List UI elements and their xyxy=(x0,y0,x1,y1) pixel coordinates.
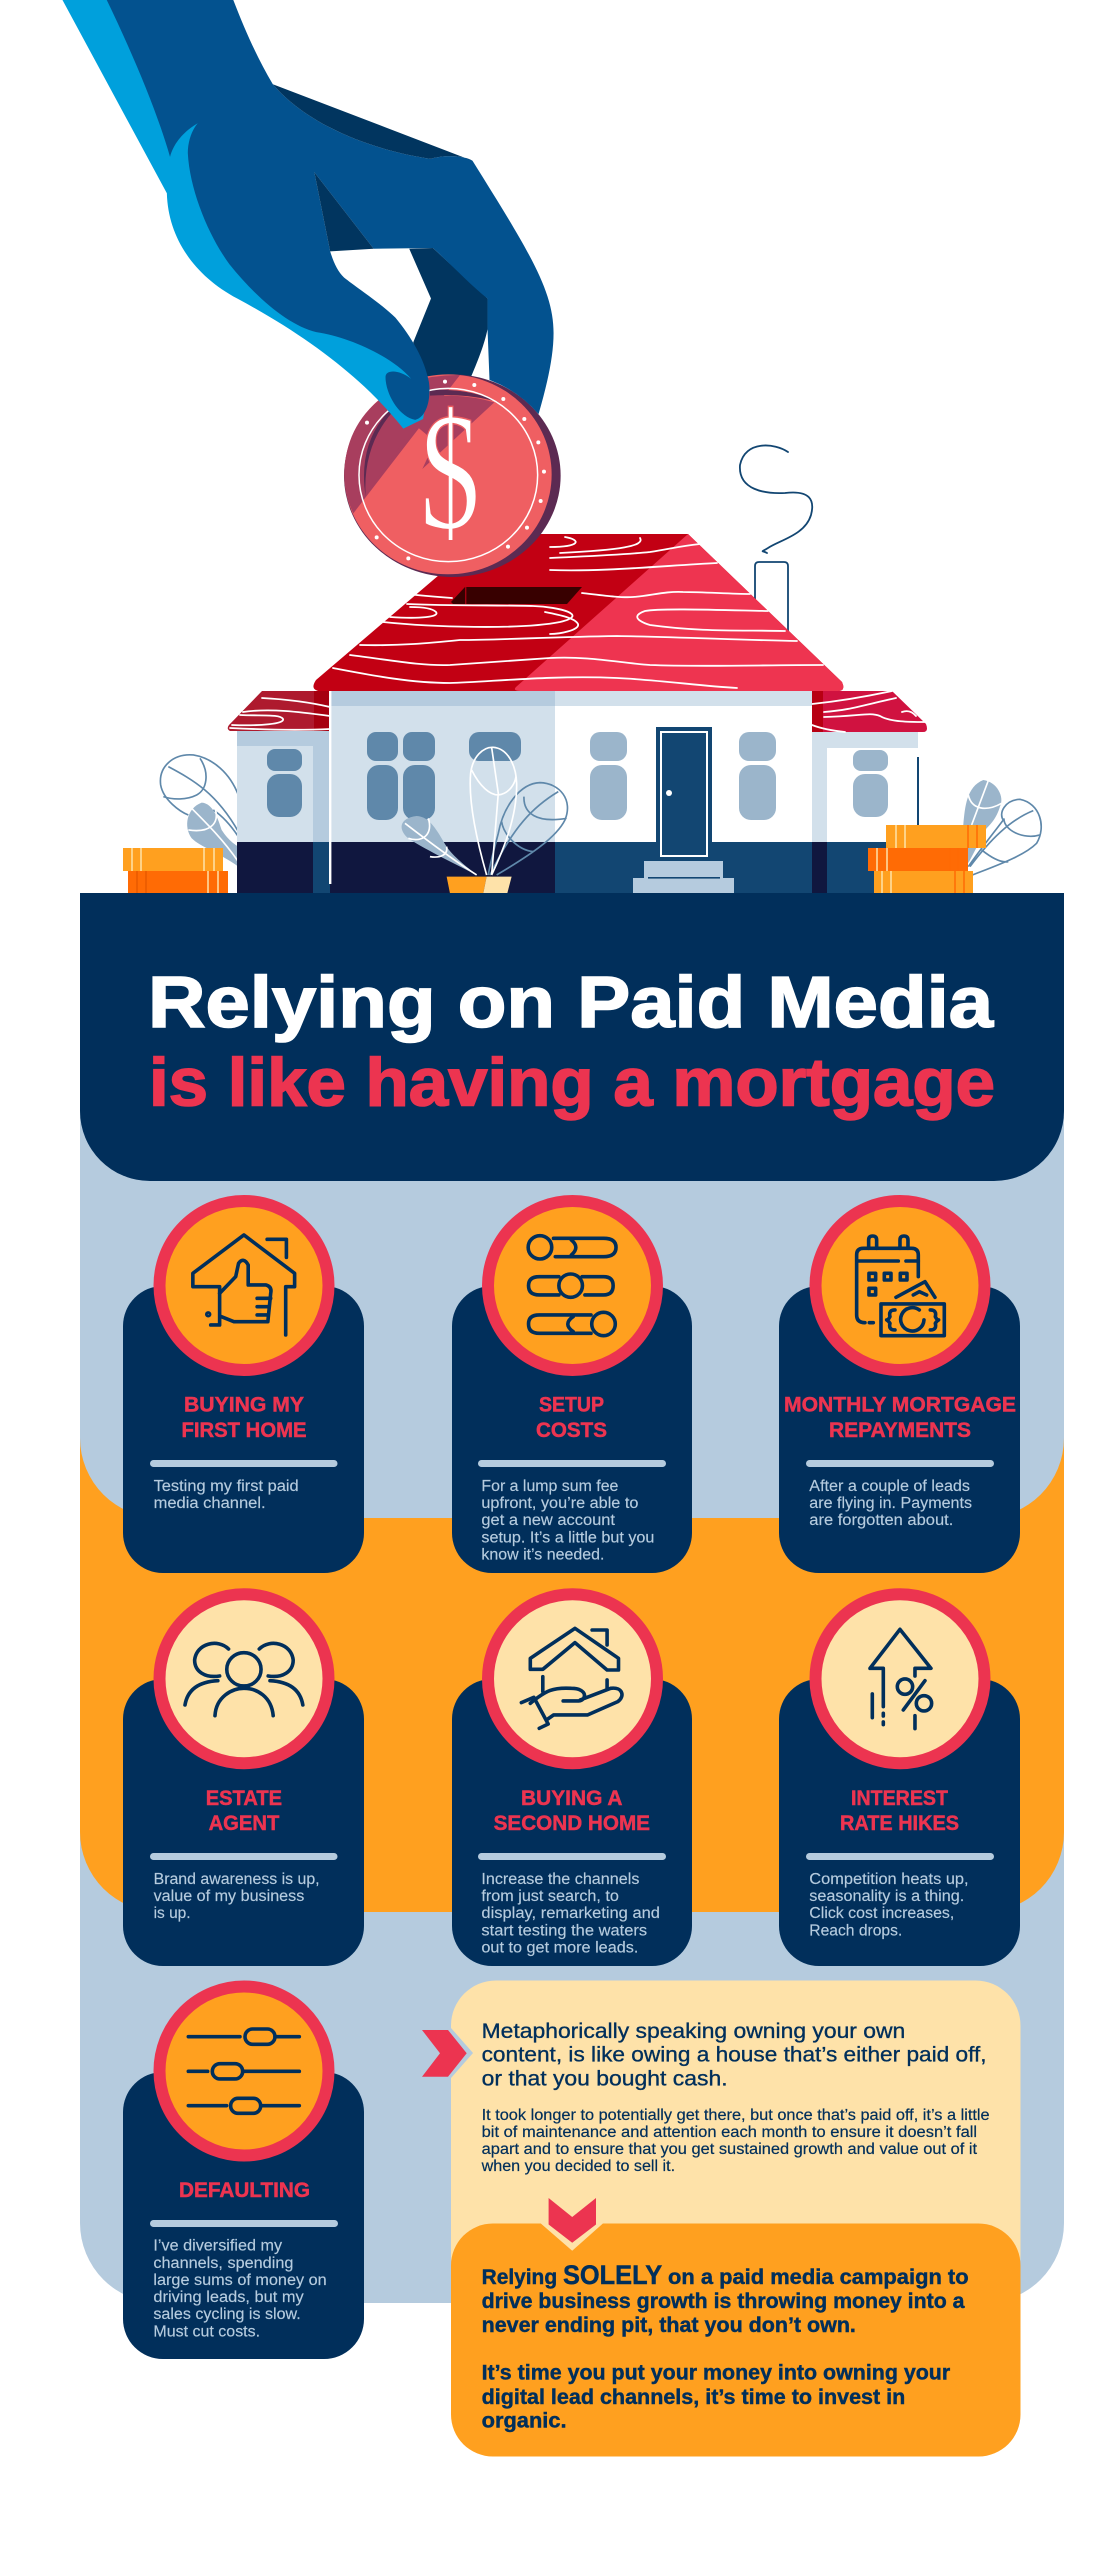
body text xyxy=(154,1478,299,1512)
conclusion text two: organic. xyxy=(482,2408,567,2432)
body text: media channel. xyxy=(154,1495,266,1512)
heading: DEFAULTING xyxy=(179,2178,310,2202)
icon: three people xyxy=(160,1594,328,1763)
heading: MONTHLY MORTGAGE xyxy=(784,1393,1016,1417)
body text: seasonality is a thing. xyxy=(809,1888,964,1905)
body text: know it’s needed. xyxy=(481,1546,604,1564)
conclusion text one: SOLELY xyxy=(563,2260,662,2290)
heading xyxy=(536,1393,607,1442)
heading xyxy=(494,1786,650,1835)
body text: driving leads, but my xyxy=(153,2289,304,2306)
body text: large sums of money on xyxy=(153,2272,327,2289)
supporting text: apart and to ensure that you get sustained growth and value out of it xyxy=(482,2141,978,2158)
front door and steps xyxy=(633,727,734,893)
body text: are flying in. Payments xyxy=(809,1495,972,1512)
supporting text: It took longer to potentially get there, but once that’s paid off, it’s a little xyxy=(482,2107,990,2124)
right wing roof xyxy=(812,691,927,732)
conclusion text two: It’s time you put your money into owning your xyxy=(482,2361,951,2385)
heading: SECOND HOME xyxy=(494,1811,650,1835)
card: defaulting xyxy=(123,1986,364,2359)
heading: INTEREST xyxy=(851,1786,948,1810)
body text xyxy=(809,1871,969,1939)
body text: value of my business xyxy=(154,1888,305,1905)
body text: is up. xyxy=(154,1905,191,1922)
body text: I’ve diversified my xyxy=(153,2238,282,2255)
coin xyxy=(344,374,561,577)
card: monthly mortgage repayments xyxy=(779,1201,1020,1573)
heading: BUYING A xyxy=(521,1786,622,1810)
right wing of house xyxy=(812,732,919,893)
left plant xyxy=(160,755,238,867)
icon: house with thumbs up xyxy=(160,1201,328,1370)
chimney and smoke xyxy=(740,445,812,640)
body text: upfront, you’re able to xyxy=(481,1495,638,1512)
hand shadows xyxy=(273,84,473,251)
conclusion text two: digital lead channels, it’s time to invest in xyxy=(482,2385,905,2409)
body text: Testing my first paid xyxy=(154,1478,299,1495)
background band: orange xyxy=(80,1300,1064,1912)
divider xyxy=(806,1460,994,1467)
card: estate agent xyxy=(123,1594,364,1966)
divider xyxy=(150,1853,338,1860)
icon: toggles xyxy=(488,1201,657,1370)
sleeve highlight xyxy=(62,0,429,429)
lead text: or that you bought cash. xyxy=(482,2066,728,2090)
divider xyxy=(150,1460,338,1467)
body text: setup. It’s a little but you xyxy=(481,1529,654,1546)
hand body xyxy=(107,0,554,420)
panel: metaphor callout xyxy=(422,1980,1020,2300)
card: setup costs xyxy=(452,1201,692,1573)
body text: After a couple of leads xyxy=(809,1478,970,1495)
body text: get a new account xyxy=(481,1512,616,1529)
conclusion text one: never ending pit, that you don’t own. xyxy=(482,2313,856,2337)
supporting text xyxy=(481,2107,990,2175)
icon: house on open hand xyxy=(488,1594,657,1763)
dollar sign: $ xyxy=(420,378,480,565)
panel: conclusion callout xyxy=(451,2198,1020,2456)
background band: lower blue xyxy=(80,1700,1064,2303)
heading: SETUP xyxy=(539,1393,604,1417)
main house walls xyxy=(329,691,812,893)
card: buying a second home xyxy=(452,1594,692,1966)
body text: Reach drops. xyxy=(809,1922,902,1939)
background band: upper blue xyxy=(80,1000,1064,1518)
divider xyxy=(806,1853,994,1860)
conclusion text one: on a paid media campaign to xyxy=(668,2265,969,2289)
left book stack xyxy=(123,848,228,893)
left wing roof xyxy=(228,691,330,731)
arrow: down chevron xyxy=(541,2198,603,2251)
arrow: right chevron xyxy=(422,2028,473,2078)
card: buying my first home xyxy=(123,1201,364,1573)
divider xyxy=(478,1460,666,1467)
right book stack xyxy=(868,825,986,893)
body text: Brand awareness is up, xyxy=(154,1871,320,1888)
body text: start testing the waters xyxy=(481,1922,647,1939)
body text xyxy=(481,1871,660,1956)
icon: sliders xyxy=(160,1986,328,2156)
heading xyxy=(840,1786,959,1835)
divider xyxy=(150,2220,338,2227)
right plant xyxy=(963,780,1041,877)
body text: out to get more leads. xyxy=(481,1940,638,1956)
heading: ESTATE xyxy=(206,1786,282,1810)
lead text xyxy=(482,2019,987,2090)
heading xyxy=(206,1786,282,1835)
lead text: content, is like owing a house that’s either paid off, xyxy=(482,2043,987,2067)
conclusion text one: drive business growth is throwing money into a xyxy=(482,2289,966,2313)
index finger shadow xyxy=(409,248,488,387)
heading: BUYING MY xyxy=(184,1393,304,1417)
title panel xyxy=(80,893,1064,1181)
lead text: Metaphorically speaking owning your own xyxy=(482,2019,905,2043)
conclusion text two xyxy=(482,2361,951,2432)
supporting text: bit of maintenance and attention each month to ensure it doesn’t fall xyxy=(482,2124,977,2141)
illustration: hand dropping coin xyxy=(62,0,561,577)
left wing of house xyxy=(237,731,331,893)
body text xyxy=(809,1478,972,1529)
body text: channels, spending xyxy=(153,2255,293,2272)
card: interest rate hikes xyxy=(779,1594,1020,1966)
body text xyxy=(153,2238,327,2340)
icon: rising arrow with percent xyxy=(816,1594,984,1763)
body text: Must cut costs. xyxy=(153,2323,260,2340)
illustration: house with plants and books xyxy=(123,445,1041,893)
title line one: Relying on Paid Media xyxy=(148,963,994,1043)
icon: calendar and money xyxy=(816,1201,984,1370)
conclusion text one xyxy=(482,2260,969,2337)
body text: Increase the channels xyxy=(481,1871,640,1888)
supporting text: when you decided to sell it. xyxy=(481,2158,675,2175)
heading: COSTS xyxy=(536,1418,607,1442)
body text: sales cycling is slow. xyxy=(153,2306,301,2323)
hand with sleeve xyxy=(62,0,554,429)
conclusion text one: Relying xyxy=(482,2265,557,2289)
heading: REPAYMENTS xyxy=(829,1418,971,1442)
heading: AGENT xyxy=(209,1811,279,1835)
heading: FIRST HOME xyxy=(182,1418,306,1442)
body text xyxy=(154,1871,320,1922)
title line two: is like having a mortgage xyxy=(149,1044,995,1120)
body text: Competition heats up, xyxy=(809,1871,969,1888)
body text: display, remarketing and xyxy=(481,1905,660,1922)
main roof xyxy=(313,534,843,691)
body text: Click cost increases, xyxy=(809,1905,954,1922)
heading: RATE HIKES xyxy=(840,1811,959,1835)
body text: from just search, to xyxy=(481,1888,619,1905)
centre plant and pot xyxy=(402,747,567,893)
divider xyxy=(478,1853,666,1860)
body text: For a lump sum fee xyxy=(481,1478,618,1495)
body text: are forgotten about. xyxy=(809,1512,953,1529)
heading xyxy=(182,1393,306,1442)
body text xyxy=(481,1478,654,1564)
heading xyxy=(784,1393,1016,1442)
